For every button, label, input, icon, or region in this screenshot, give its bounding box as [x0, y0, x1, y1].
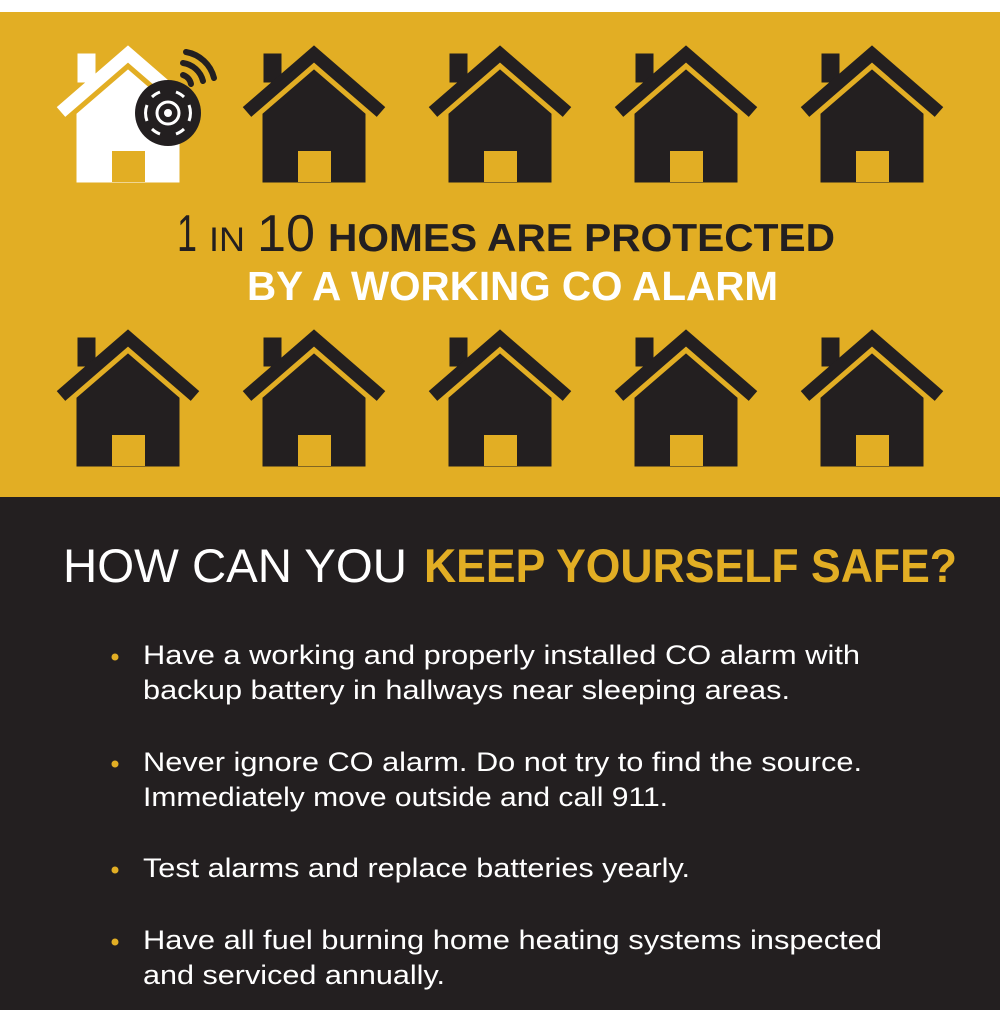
tip 1	[112, 640, 860, 705]
stat headline	[177, 205, 835, 309]
tip 4: Have all fuel burning home heating systems inspected	[143, 925, 882, 955]
icons: unprotected houses row 2	[61, 338, 939, 466]
tip 3: Test alarms and replace batteries yearly.	[143, 853, 690, 883]
tip 2: Never ignore CO alarm. Do not try to find the source.	[143, 747, 862, 777]
icons: unprotected houses row 1	[247, 54, 939, 182]
tip 2	[112, 747, 862, 812]
stat headline: BY A WORKING CO ALARM	[247, 263, 778, 309]
heading: KEEP YOURSELF SAFE?	[424, 539, 957, 592]
tip 1: backup battery in hallways near sleeping areas.	[143, 675, 790, 705]
heading: HOW CAN YOU	[63, 539, 407, 592]
heading	[63, 539, 957, 592]
tip 2: Immediately move outside and call 911.	[143, 782, 668, 812]
icon: protected house with alarm	[61, 52, 214, 182]
door cutouts	[112, 151, 889, 466]
panel: yellow stats	[0, 12, 1000, 497]
stat headline: HOMES ARE PROTECTED	[328, 217, 835, 260]
tip 4: and serviced annually.	[143, 960, 445, 990]
tip 1: Have a working and properly installed CO alarm with	[143, 640, 860, 670]
stat headline: IN	[209, 221, 245, 259]
stat headline: 10	[257, 205, 315, 263]
panel: dark tips	[0, 497, 1000, 1010]
stat headline: 1	[177, 205, 197, 263]
tip 4	[112, 925, 882, 990]
tips list	[112, 640, 882, 990]
